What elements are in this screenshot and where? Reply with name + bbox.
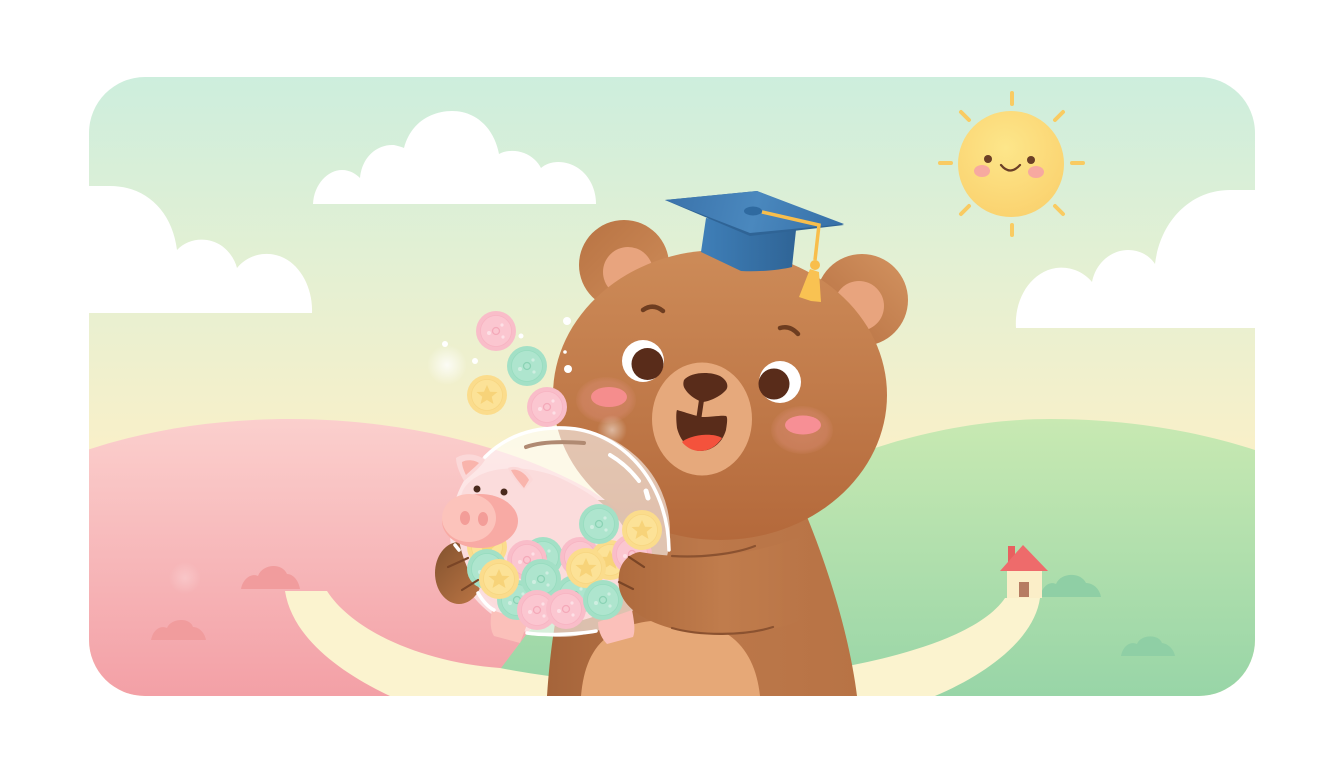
bear bbox=[547, 191, 908, 696]
bush: green lower bbox=[1121, 636, 1175, 656]
bear nose bbox=[683, 373, 727, 402]
bear mouth bbox=[676, 410, 727, 451]
illustration: bear graduate saving coins in a glass piggy bank bbox=[89, 77, 1255, 696]
bear belly bbox=[581, 620, 760, 696]
bush: pink lower bbox=[151, 620, 206, 640]
cloud: right bbox=[1016, 190, 1280, 328]
graduation cap bbox=[665, 191, 844, 302]
bush: green by house bbox=[1040, 575, 1101, 597]
pig left ear bbox=[456, 454, 485, 481]
cloud: top centre bbox=[313, 111, 596, 204]
left eye bbox=[622, 340, 664, 382]
bear muzzle bbox=[652, 362, 752, 476]
sun bbox=[940, 93, 1083, 235]
house bbox=[1000, 545, 1048, 598]
right eye bbox=[758, 361, 801, 403]
glass jar fill bbox=[450, 427, 670, 637]
bear right ear bbox=[816, 254, 908, 346]
hill: pink left bbox=[60, 419, 620, 696]
sparkles bbox=[169, 317, 627, 594]
bear left paw bbox=[435, 542, 483, 604]
hill: green right bbox=[480, 419, 1300, 696]
philtrum bbox=[699, 400, 702, 417]
bear right arm bbox=[618, 535, 805, 634]
left eyebrow bbox=[643, 307, 663, 311]
winding road bbox=[285, 591, 1040, 696]
glass jar rim and highlights bbox=[455, 428, 669, 634]
bush: pink upper bbox=[241, 566, 300, 589]
sky background panel bbox=[89, 77, 1255, 696]
left cheek bbox=[578, 378, 634, 422]
coins inside jar bbox=[467, 504, 662, 630]
right cheek bbox=[771, 406, 833, 454]
bear head bbox=[553, 250, 887, 540]
pig eyes bbox=[474, 486, 508, 496]
paw finger lines bbox=[448, 558, 478, 590]
piggy bank feet bbox=[491, 610, 634, 644]
pig right ear bbox=[508, 467, 529, 488]
bear body bbox=[547, 500, 857, 696]
pig snout bbox=[442, 494, 518, 548]
piggy bank body bbox=[458, 468, 625, 623]
falling coins bbox=[467, 311, 567, 427]
bear left ear bbox=[579, 220, 668, 300]
right eyebrow bbox=[780, 327, 798, 334]
piggy head bbox=[442, 454, 533, 548]
cloud: left bbox=[89, 186, 312, 313]
